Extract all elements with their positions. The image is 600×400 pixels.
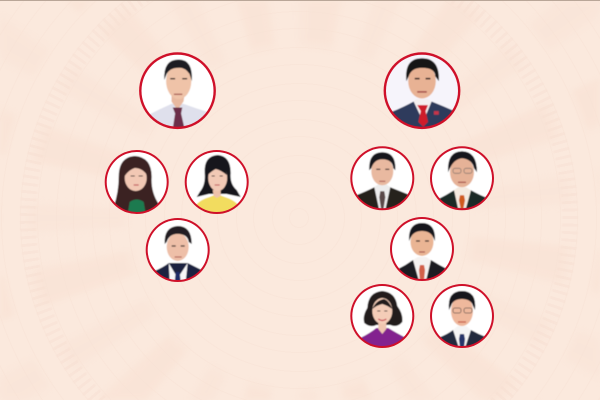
portrait: man in navy suit, red tie, badge <box>384 52 460 129</box>
portrait: woman with long hair, green top <box>105 150 169 214</box>
portrait: woman in yellow ao dai <box>185 150 249 214</box>
portrait: man in white shirt, maroon tie <box>139 52 216 129</box>
top edge line <box>0 0 600 1</box>
left group of portraits <box>105 52 249 282</box>
portrait: young man in dark suit, orange tie <box>390 217 454 281</box>
portrait: man with glasses, navy suit <box>430 284 494 348</box>
portrait: man with glasses, orange tie <box>430 146 494 210</box>
portrait: man in black suit, grey tie <box>350 146 414 210</box>
portrait: man in navy suit <box>146 218 210 282</box>
right group of portraits <box>350 52 494 348</box>
portrait: woman in purple ao dai <box>350 284 414 348</box>
